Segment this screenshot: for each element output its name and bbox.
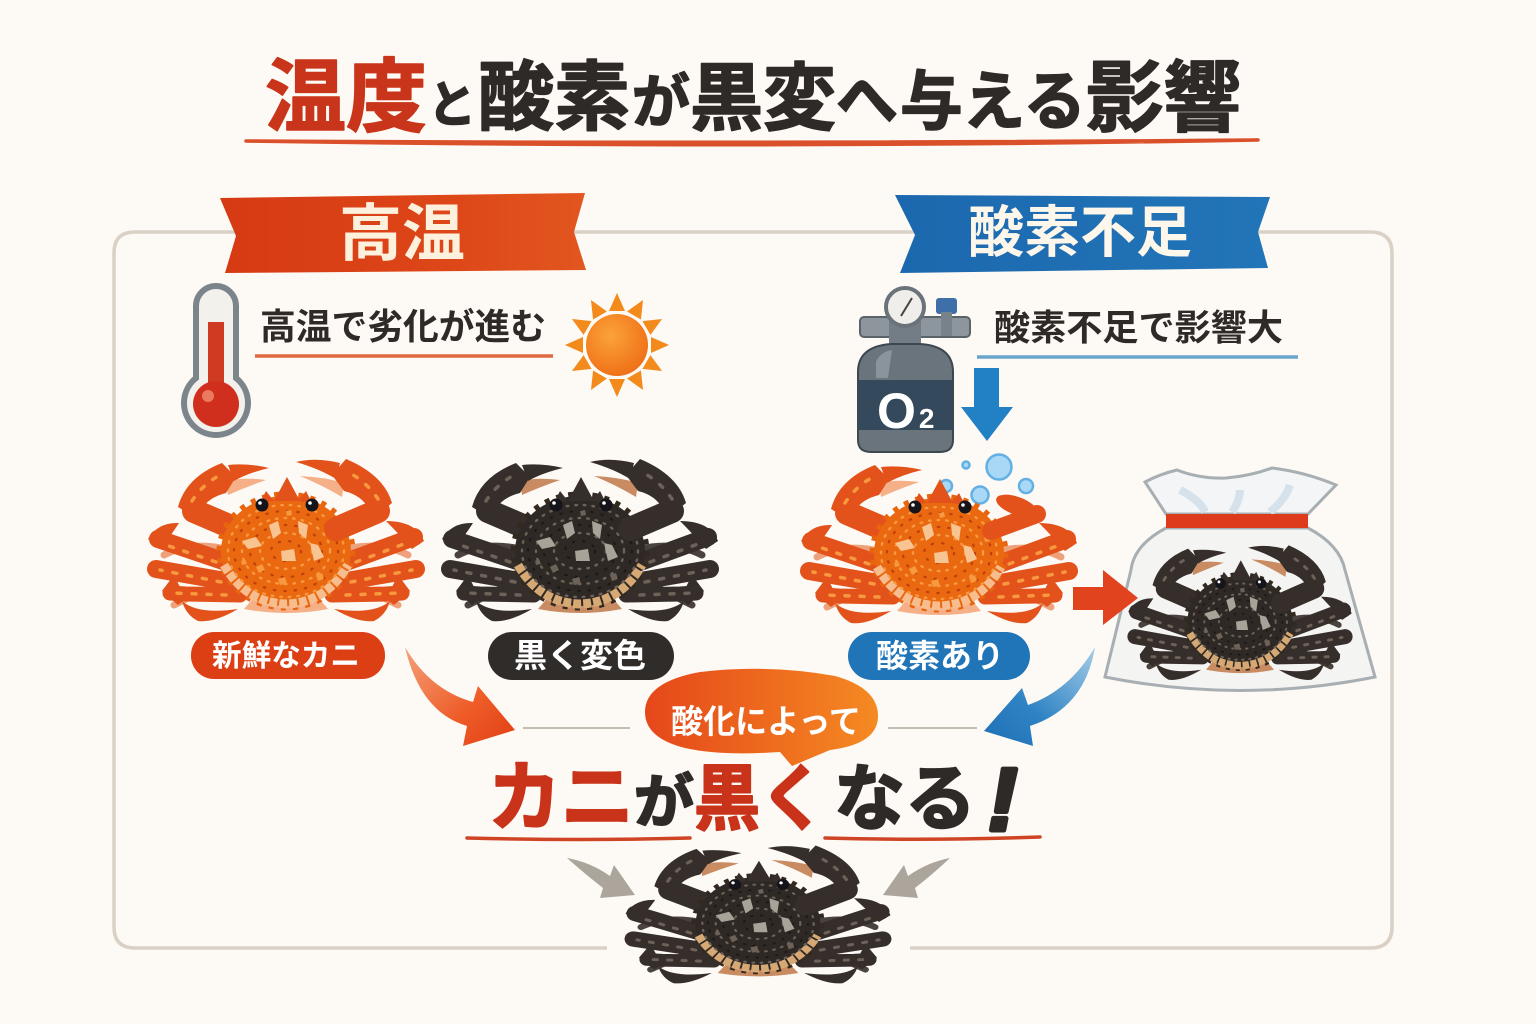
text: high temperature note: 高温で劣化が進む bbox=[260, 306, 546, 347]
headline: crab turns black: ! bbox=[988, 750, 1017, 849]
crab: fresh bbox=[148, 459, 424, 621]
text: oxygen shortage note: 酸素不足で影響大 bbox=[994, 307, 1283, 348]
icon: thermometer bbox=[184, 286, 248, 435]
arrow: blue curved bbox=[984, 647, 1095, 746]
banner: oxygen shortage: 酸素不足 bbox=[968, 201, 1192, 264]
headline: crab turns black: カニ bbox=[488, 756, 634, 841]
callout: by oxidation bbox=[645, 669, 878, 766]
callout: by oxidation: 酸化によって bbox=[671, 703, 861, 740]
headline: crab turns black: が bbox=[634, 770, 694, 835]
pill: fresh crab bbox=[191, 632, 385, 679]
title: 影響 bbox=[1086, 54, 1241, 142]
icon: plastic bag with crab bbox=[1105, 468, 1375, 690]
title: へ bbox=[836, 67, 898, 136]
pill: with oxygen: 酸素あり bbox=[876, 638, 1004, 674]
arrow: grey right bbox=[883, 858, 950, 898]
title: 温度 bbox=[265, 53, 427, 142]
pill: fresh crab: 新鮮なカニ bbox=[212, 640, 360, 673]
banner: high temperature bbox=[220, 193, 586, 273]
pill: with oxygen bbox=[848, 632, 1030, 680]
icon: oxygen tank bbox=[858, 288, 970, 452]
title: が bbox=[632, 70, 690, 135]
arrow: grey left bbox=[567, 858, 635, 898]
title: 与える bbox=[900, 66, 1086, 138]
icon: sun bbox=[565, 293, 669, 397]
pill: turns black bbox=[488, 632, 674, 680]
title bbox=[265, 53, 1241, 142]
icon: oxygen tank: O2 bbox=[877, 383, 934, 439]
headline: crab turns black: 黒く bbox=[694, 760, 826, 840]
banner: oxygen shortage bbox=[895, 195, 1270, 273]
arrow: orange curved bbox=[405, 647, 515, 746]
arrow: red into bag bbox=[1073, 570, 1138, 625]
crab: final black bbox=[626, 846, 890, 983]
banner: high temperature: 高温 bbox=[339, 200, 465, 269]
title: 黒変 bbox=[690, 57, 836, 140]
title: 酸素 bbox=[478, 56, 630, 141]
arrow: oxygen down bbox=[961, 368, 1013, 441]
icon: bubbles bbox=[940, 454, 1033, 504]
headline: crab turns black: なる bbox=[834, 760, 976, 840]
title underline bbox=[246, 140, 1258, 145]
pill: turns black: 黒く変色 bbox=[514, 637, 646, 674]
headline underlines bbox=[467, 837, 1040, 840]
content frame bbox=[114, 232, 1392, 948]
side rules bbox=[523, 727, 977, 729]
title: と bbox=[428, 77, 476, 133]
crab: blackened bbox=[442, 459, 718, 621]
crab: with oxygen bbox=[801, 465, 1077, 623]
headline: crab turns black bbox=[488, 750, 1017, 849]
